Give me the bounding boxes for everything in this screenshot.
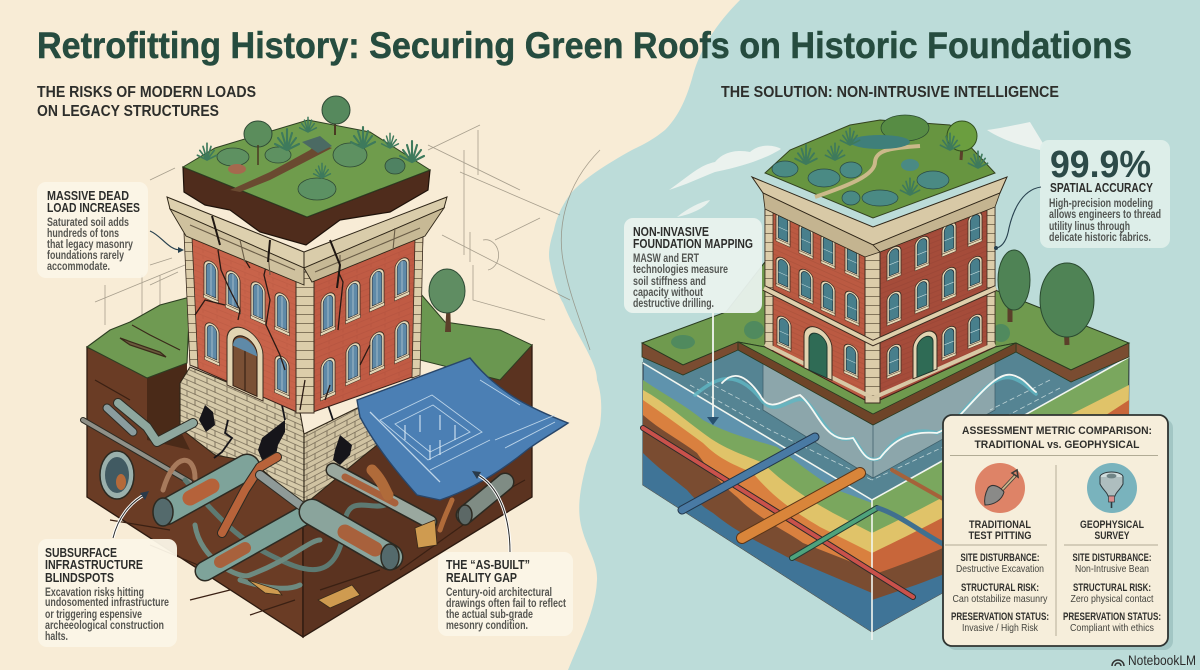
frieze left — [170, 209, 304, 285]
soil block left face — [87, 347, 303, 637]
panel title: ASSESSMENT METRIC COMPARISON: — [962, 425, 1152, 437]
callout: 99.9 percent stat: SPATIAL ACCURACY — [1050, 180, 1153, 195]
right building windows row 3 and doors — [777, 312, 982, 380]
soil pillar below left lawn — [147, 363, 190, 450]
callout: subsurface blindspots: archeeological construction — [45, 620, 164, 632]
callout: massive dead load: hundreds of tons — [47, 228, 119, 240]
side trees and shrubs — [671, 250, 1094, 349]
callout: subsurface blindspots: INFRASTRUCTURE — [45, 557, 143, 572]
column: traditional: Invasive / High Risk — [962, 622, 1039, 634]
panel title: TRADITIONAL vs. GEOPHYSICAL — [974, 439, 1140, 451]
callout: massive dead load: that legacy masonry — [47, 239, 133, 251]
cloud: right scene left cloud — [669, 146, 781, 190]
panel title — [962, 425, 1152, 451]
cornice left — [167, 197, 304, 268]
translucent excavation volume — [643, 350, 1129, 500]
left wall — [186, 233, 297, 412]
stratum brown left — [643, 415, 872, 632]
translucent foundation — [763, 360, 995, 478]
callout: 99.9 percent stat: allows engineers to thread — [1049, 209, 1161, 221]
sketch lines: architectural construction drawing — [95, 125, 600, 350]
callout: subsurface blindspots: halts. — [45, 631, 68, 643]
roof plants — [197, 96, 424, 200]
right building center quoin — [865, 243, 880, 403]
callout: 99.9 percent stat: delicate historic fabrics. — [1049, 232, 1151, 244]
manhole opening — [100, 451, 134, 499]
callout: non-invasive mapping: MASW and ERT — [633, 253, 699, 265]
column: traditional: PRESERVATION STATUS: — [951, 611, 1049, 623]
soil front strip — [738, 342, 1016, 425]
column: traditional: Destructive Excavation — [956, 563, 1044, 575]
pipes under building — [643, 428, 945, 597]
strata right orange — [872, 400, 1129, 632]
column: traditional: STRUCTURAL RISK: — [961, 582, 1039, 594]
roof path — [230, 143, 332, 192]
soil block right face — [303, 345, 532, 637]
callout: as-built gap: REALITY GAP — [446, 570, 517, 585]
illustration: surveyed building with geophysics — [642, 115, 1129, 640]
callout: massive dead load: Saturated soil adds — [47, 217, 129, 229]
callout: massive dead load: foundations rarely — [47, 250, 124, 262]
right building windows row 1 — [776, 210, 982, 281]
column: geophysical: SITE DISTURBANCE: — [1072, 552, 1152, 564]
tree beside building — [429, 269, 465, 332]
arrow: spatial accuracy — [994, 187, 1041, 250]
panel: assessment metric comparison — [943, 415, 1168, 646]
arrow: subsurface — [113, 491, 149, 538]
right building floor band — [764, 288, 996, 343]
column: geophysical: GEOPHYSICAL — [1080, 519, 1144, 531]
callout: as-built gap: drawings often fail to reflect — [446, 598, 566, 610]
strata right yellow — [872, 385, 1129, 632]
arrow: as-built — [472, 471, 510, 552]
callout: massive dead load: LOAD INCREASES — [47, 200, 140, 215]
callout: as-built gap: Century-oid architectural — [446, 587, 552, 599]
column: traditional: TRADITIONAL — [969, 519, 1031, 531]
frieze right — [304, 208, 444, 282]
arched doorway — [227, 321, 263, 401]
right building base band — [765, 344, 995, 398]
foundation left stones — [180, 367, 304, 505]
callout: non-invasive mapping — [624, 218, 762, 313]
column: traditional: SITE DISTURBANCE: — [960, 552, 1040, 564]
column: geophysical: Compliant with ethics — [1070, 622, 1154, 634]
illustration: failing historic building — [83, 96, 568, 637]
stratum orange left — [643, 400, 872, 632]
winding roof path — [815, 146, 920, 197]
callout: subsurface blindspots: Excavation risks hitting — [45, 587, 144, 599]
soil texture — [95, 380, 525, 615]
right wall — [313, 233, 423, 412]
heading: risks: ON LEGACY STRUCTURES — [37, 103, 219, 120]
windows upper right row — [321, 255, 409, 336]
heading: solution: THE SOLUTION: NON-INTRUSIVE INTELLIGENCE — [721, 84, 1059, 101]
column: geophysical: Non-Intrusive Bean — [1075, 563, 1149, 575]
arrow: non-invasive — [707, 313, 719, 425]
callout: non-invasive mapping: destructive drilling. — [633, 298, 714, 310]
foundation right stones — [304, 375, 428, 505]
blueprint sheet — [357, 358, 568, 500]
callout: massive dead load — [37, 182, 148, 278]
right building left wall — [765, 203, 865, 400]
cornice right — [304, 197, 447, 268]
column: traditional: Can otstabilize masunry — [952, 593, 1048, 605]
seismic waves — [695, 375, 1036, 460]
callout: massive dead load: accommodate. — [47, 261, 110, 273]
roof pond — [302, 136, 332, 153]
callout: 99.9 percent stat: High-precision modeling — [1049, 198, 1153, 210]
center quoin — [296, 272, 314, 413]
left and right edge quoins — [184, 233, 423, 378]
column: geophysical: Zero physical contact — [1070, 593, 1154, 605]
heading: risks — [37, 84, 256, 120]
windows lower row — [205, 318, 409, 401]
column: geophysical: STRUCTURAL RISK: — [1073, 582, 1151, 594]
wall cracks — [195, 240, 370, 410]
callout: 99.9 percent stat: utility linus through — [1049, 221, 1130, 233]
cloud: right scene right cloud — [987, 122, 1044, 150]
heading: risks: THE RISKS OF MODERN LOADS — [37, 84, 256, 101]
right building quoins — [765, 203, 995, 351]
debris — [248, 520, 437, 608]
strata right face base — [872, 357, 1129, 632]
callout: 99.9 percent stat — [1040, 140, 1170, 248]
cornice crack — [212, 216, 340, 288]
right building frieze — [763, 193, 1000, 257]
icon: survey probe — [1087, 463, 1137, 513]
strata left face base — [643, 363, 872, 632]
frieze ornaments — [190, 225, 420, 275]
icon: shovel — [975, 463, 1025, 513]
column: traditional — [951, 519, 1049, 634]
callout: subsurface blindspots — [38, 539, 177, 647]
dashed survey grid — [690, 378, 1060, 480]
stratum deep blue left — [643, 453, 872, 632]
stratum yellow left — [643, 390, 872, 632]
roof lawn right building — [765, 120, 995, 218]
pipe open ends — [153, 498, 472, 570]
callout: as-built gap: mesonry condition. — [446, 620, 528, 632]
callout: as-built gap — [438, 552, 573, 636]
callout: subsurface blindspots: BLINDSPOTS — [45, 570, 114, 585]
right building windows row 2 — [776, 254, 982, 326]
callout: subsurface blindspots: undosomented infrastructure — [45, 597, 169, 609]
callout: non-invasive mapping: technologies measure — [633, 264, 728, 276]
callout: non-invasive mapping: soil stiffness and — [633, 276, 706, 288]
roof lawn — [183, 120, 430, 217]
lawn left — [87, 297, 190, 378]
heavy soil slab on roof — [183, 167, 430, 245]
right building right wall — [880, 205, 995, 400]
big stat: 99.9% — [1050, 144, 1151, 186]
callout: subsurface blindspots: SUBSURFACE — [45, 545, 117, 560]
callout: massive dead load: MASSIVE DEAD — [47, 188, 129, 203]
lawn crack — [120, 325, 180, 357]
strata right blue — [872, 470, 1128, 632]
strata right brown — [872, 440, 1128, 632]
teal wavy panel background — [549, 0, 1200, 670]
cloud: small cloud — [677, 200, 710, 217]
windows upper left row — [204, 258, 289, 336]
stratum green left — [643, 380, 872, 632]
roof plants right building — [772, 115, 988, 206]
underground pipes — [83, 403, 505, 588]
foundation breach holes — [199, 405, 352, 465]
lawn right — [420, 293, 532, 380]
callout: non-invasive mapping: capacity without — [633, 287, 703, 299]
callout: as-built gap: THE “AS-BUILT” — [446, 557, 530, 572]
panel shadow — [947, 419, 1173, 650]
callout: non-invasive mapping: FOUNDATION MAPPING — [633, 236, 753, 251]
column: geophysical: SURVEY — [1094, 530, 1130, 542]
callout: non-invasive mapping: NON-INVASIVE — [633, 224, 709, 239]
lawn back right — [995, 290, 1129, 370]
foundation crack — [214, 395, 333, 458]
column: traditional: TEST PITTING — [968, 530, 1032, 542]
lawn front strip — [738, 342, 1016, 416]
column: geophysical — [1063, 519, 1161, 634]
lawn back left — [642, 262, 765, 365]
arrow: dead load — [150, 231, 184, 253]
callout: as-built gap: the actual sub-grade — [446, 609, 533, 621]
callout: subsurface blindspots: or triggering espensive — [45, 609, 142, 621]
ground soil edges — [642, 342, 1129, 382]
white section outline — [643, 357, 1129, 640]
right building floor band light — [764, 288, 996, 343]
column: geophysical: PRESERVATION STATUS: — [1063, 611, 1161, 623]
right building cornice — [752, 177, 1007, 245]
